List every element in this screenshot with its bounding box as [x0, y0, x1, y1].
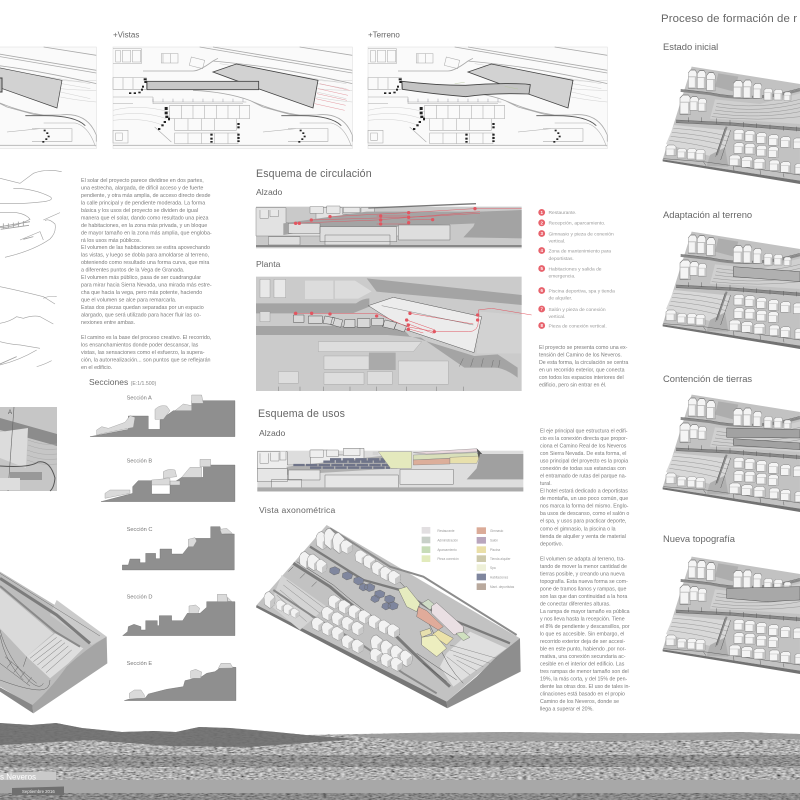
section A — [90, 395, 235, 437]
numbered list: Habitaciones y salida de — [548, 266, 602, 272]
text: uses description: deportivo. — [540, 541, 563, 547]
text: project description: la calle principal y de pendiente moderada. La forma — [81, 200, 205, 206]
numbered list: Salón y pieza de conexión — [548, 307, 606, 313]
text: project description: de mayor tamaño en la zona más amplia, que engloba- — [81, 230, 212, 236]
legend: Habitaciones — [490, 575, 509, 579]
heading: Esquema de circulación: Esquema de circulación — [256, 168, 372, 180]
text: project description: El camino es la base del proceso creativo. El recorrido, — [81, 335, 211, 341]
heading: Contención de tierras: Contención de tierras — [663, 373, 752, 384]
numbered list: Pieza de conexión vertical. — [548, 323, 607, 329]
heading: Vista axonométrica: Vista axonométrica — [259, 505, 336, 515]
plan: +Vistas — [113, 47, 352, 149]
text: project description: vistas, las sensaciones como el esfuerzo, la supera- — [81, 350, 205, 356]
numbered list: 3 — [540, 231, 543, 236]
text: uses description: El eje principal que estructura el edifi- — [540, 428, 628, 434]
heading: +Vistas: +Vistas — [113, 30, 139, 40]
legend: Restaurante — [437, 529, 455, 533]
numbered list: vertical. — [548, 314, 565, 320]
text: uses description: lo que es accesible. Sin embargo, el — [540, 632, 624, 638]
axonometric: new topography — [663, 557, 800, 674]
section C — [122, 527, 234, 570]
date chip — [12, 786, 64, 795]
text: project description: de habitaciones, en la zona más privada, y un bloque — [81, 223, 207, 229]
text: project description: alargado, que será utilizado para hacer fluir las co- — [81, 312, 201, 318]
text: uses description: nos marca la forma del mismo. Englo- — [540, 504, 629, 510]
numbered list: Restaurante. — [548, 210, 577, 216]
section E — [124, 661, 236, 701]
text: uses description: Camino de los Neveros, donde se — [540, 699, 619, 705]
text: project description: las vistas, y luego se dobla para amoldarse al terreno, — [81, 253, 209, 259]
text: uses description: ciona el Camino Real de los Neveros — [540, 444, 627, 450]
sketches — [0, 170, 62, 367]
text: uses description: llega a superar el 20%. — [540, 707, 594, 713]
text: circulation note: edificio, pero sin entrar en él. — [539, 382, 606, 388]
heading: Estado inicial: Estado inicial — [663, 41, 718, 52]
plan: section key — [0, 407, 57, 491]
legend: Salón — [490, 538, 498, 542]
section D: Sección D — [127, 595, 152, 601]
text: circulation note: De esta forma, la circulación se centra — [539, 360, 628, 366]
numbered list — [538, 209, 615, 329]
text: uses description: clinaciones está basado en el propio — [540, 692, 625, 698]
text: uses description: diente las otras dos. El uso de tales in- — [540, 684, 630, 690]
elevation: uses — [257, 448, 523, 492]
text: circulation note: en un recorrido exterior, que conecta — [539, 368, 625, 374]
title: formation process: Proceso de formación de r — [661, 13, 797, 25]
text: project description: los ensanchamientos donde poder descansar, las — [81, 342, 199, 348]
heading: Nueva topografía: Nueva topografía — [663, 533, 736, 544]
text: uses description: como el gimnasio, la piscina o la — [540, 526, 616, 532]
text: uses description: son las que dan continuidad a la hora — [540, 594, 627, 600]
project name chip — [0, 772, 56, 782]
heading: Secciones: Secciones (E:1/1.500) — [89, 377, 157, 387]
numbered list: 5 — [540, 266, 543, 271]
text: project description: pendiente, y otra más amplia, de acceso directo desde — [81, 193, 211, 199]
text: project description: El volumen más público, pasa de ser cuadrangular — [81, 275, 201, 281]
text: uses description: de conectar diferentes alturas. — [540, 601, 611, 607]
plan: +Terreno — [368, 47, 607, 149]
sections — [90, 395, 236, 701]
text: uses description: tando de mover la menor cantidad de — [540, 564, 627, 570]
text: uses description: tres rampas de menor tamaño son del — [540, 669, 629, 675]
axonometric: initial state — [663, 67, 800, 184]
text: project description: cha que hacia la vega, pero más potente, haciendo — [81, 290, 202, 296]
numbered list: 4 — [540, 248, 543, 253]
text: uses description: el 8% de pendiente y descansillos, por — [540, 624, 630, 630]
footer bar — [0, 780, 800, 793]
axonometric: site view (left) — [0, 572, 107, 713]
legend: Piscina — [490, 548, 500, 552]
numbered list: 1 — [540, 210, 543, 215]
text: project description: en el edificio. — [81, 365, 112, 371]
section D — [123, 594, 235, 636]
numbered list: vertical. — [548, 238, 565, 244]
legend: Administración — [437, 538, 458, 542]
text: project description: una estrecha, alargada, de difícil acceso y de fuerte — [81, 185, 203, 191]
text: uses description: tierras posible, y creando una nueva — [540, 571, 625, 577]
text: project description: ción, la autorrealización... son puntos que se reflejarán — [81, 357, 211, 363]
text: project description: rá los usos más públicos. — [81, 238, 141, 244]
legend: Spa — [490, 566, 496, 570]
text: uses description: conexión de todas sus estancias con — [540, 466, 626, 472]
legend: Gimnasio — [490, 529, 504, 533]
text: uses description: 19%, la más corta, y del 15% de pen- — [540, 677, 628, 683]
heading: Planta: Planta — [256, 259, 281, 269]
text: project description: nexiones entre ambas. — [81, 320, 135, 326]
text: uses description: uso principal del proyecto es la propia — [540, 459, 628, 465]
text: uses description: de montaña, un uso poco común, que — [540, 496, 628, 502]
numbered list: 8 — [540, 323, 543, 328]
text: project description: que el volumen se alce para remarcarla. — [81, 298, 176, 304]
text: uses description: ble en este punto, habiendo ,por nor- — [540, 647, 626, 653]
legend: Pieza conexión — [437, 557, 459, 561]
numbered list: Piscina deportiva, spa y tienda — [548, 288, 615, 294]
heading: +Terreno: +Terreno — [368, 30, 400, 40]
text: project description: Estas dos piezas quedan separadas por un espacio — [81, 305, 204, 311]
text: project description: para mirar hacia Sierra Nevada, una mirada más estre- — [81, 283, 212, 289]
text: uses description: recorrido exterior deja de ser accesi- — [540, 639, 625, 645]
axonometric: earth containment — [663, 395, 800, 512]
text: project description: básica y los usos del proyecto se dividen de igual — [81, 208, 198, 214]
text: uses description: cio es la conexión directa que propor- — [540, 436, 628, 442]
plan: circulation — [256, 277, 532, 391]
plan: base (left, clipped) — [0, 47, 96, 149]
numbered list: 7 — [540, 307, 543, 312]
section B: Sección B — [127, 459, 152, 465]
text: uses description: tural. — [540, 481, 552, 487]
text: uses description: La rampa de mayor tamaño es pública — [540, 609, 630, 615]
numbered list: Recepción, aparcamiento. — [548, 221, 605, 227]
project name chip: s Neveros — [0, 772, 36, 782]
numbered list: Gimnasio y pieza de conexión — [548, 231, 614, 237]
heading: Alzado (circulación): Alzado — [256, 187, 282, 197]
text: project description: manera que el solar, dando como resultado una pieza — [81, 215, 208, 221]
heading: Alzado (usos): Alzado — [259, 428, 285, 438]
text: uses description: El hotel estará dedicado a deportistas — [540, 489, 628, 495]
legend: Aparcamiento — [437, 548, 457, 552]
section C: Sección C — [127, 527, 152, 533]
numbered list: Zona de mantenimiento para — [548, 248, 611, 254]
text: uses description: el spa, y usos para practicar deporte, — [540, 519, 626, 525]
section E: Sección E — [127, 661, 152, 667]
legend — [422, 527, 515, 590]
text: circulation note: con todos los espacios interiores del — [539, 375, 624, 381]
section B — [101, 459, 235, 502]
text: uses description: cesible en el interior del edificio. Las — [540, 662, 625, 668]
date chip: Septiembre 2016 — [22, 789, 55, 794]
text: uses description: con Sierra Nevada. De esta forma, el — [540, 451, 626, 457]
text: uses description: mativa, una conexión secundaria ac- — [540, 654, 626, 660]
text: uses description: topografía. Esta nueva forma se com- — [540, 579, 628, 585]
axonometric: terrain adaptation — [663, 232, 800, 349]
axonometric: uses — [256, 525, 521, 708]
text: uses description: tienda de alquiler y venta de material — [540, 534, 626, 540]
numbered list: deportistas. — [548, 256, 574, 262]
text: uses description: y nos lleva hasta la recepción. Tiene — [540, 616, 625, 622]
text: uses description: el entramado de rutas del parque na- — [540, 474, 627, 480]
numbered list: 6 — [540, 288, 543, 293]
numbered list: de alquiler. — [548, 296, 572, 302]
text: project description: a diferentes puntos de la Vega de Granada. — [81, 268, 184, 274]
elevation: circulation — [256, 204, 522, 248]
text: project description: El volumen de las habitaciones se estira apovechando — [81, 245, 210, 251]
numbered list: 2 — [540, 220, 543, 225]
text: circulation note: tensión del Camino de los Neveros. — [539, 352, 622, 358]
plan: section key: A — [8, 410, 12, 416]
heading: Adaptación al terreno: Adaptación al terreno — [663, 209, 752, 220]
legend: Tienda alquiler — [490, 557, 511, 561]
numbered list: emergencia. — [548, 274, 575, 280]
text: project description: obteniendo como resultado una forma curva, que mira — [81, 260, 209, 266]
text: project description: El solar del proyecto parece dividirse en dos partes, — [81, 178, 204, 184]
text: uses description: El volumen se adapta al terreno, tra- — [540, 556, 625, 562]
panorama: city photo — [0, 723, 800, 800]
text: circulation note: El proyecto se presenta como una ex- — [539, 345, 628, 351]
legend: Mant. deportistas — [490, 585, 515, 589]
text: uses description: ba usos de descanso, como el salón o — [540, 511, 629, 517]
section A: Sección A — [127, 395, 152, 401]
heading: Esquema de usos: Esquema de usos — [258, 408, 345, 420]
text: uses description: pone de tramos llanos y rampas, que — [540, 586, 626, 592]
